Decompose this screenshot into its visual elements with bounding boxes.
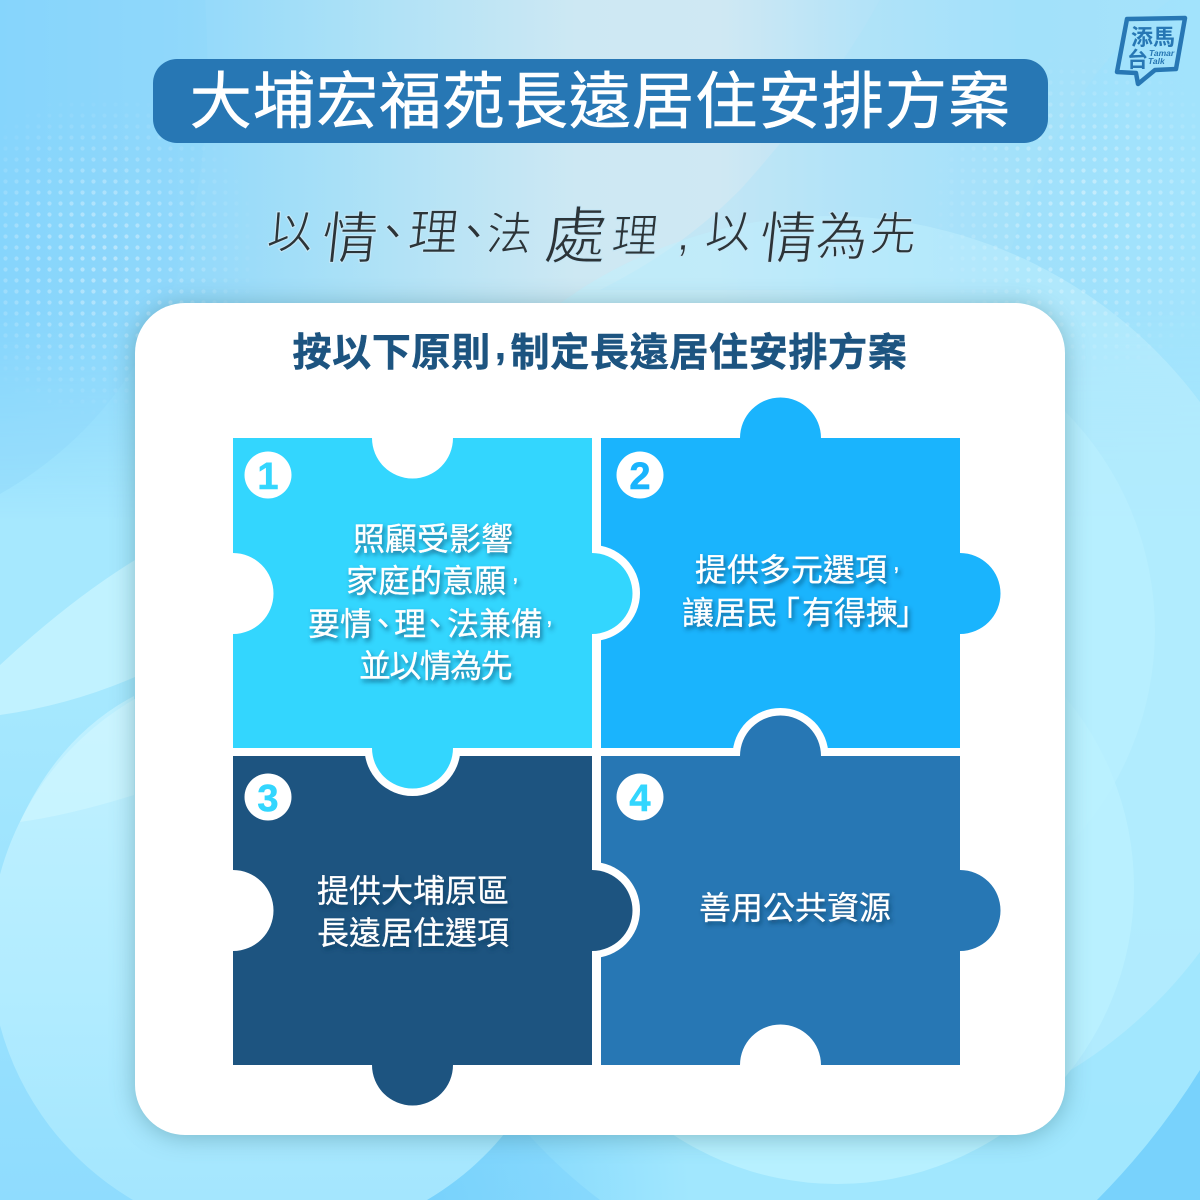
title banner: 大埔宏福苑長遠居住安排方案	[190, 68, 1011, 137]
logo: Tamar Talk: Tamar	[1149, 48, 1175, 58]
logo: Tamar Talk: 台	[1127, 48, 1148, 72]
text 2: 有得揀	[802, 595, 898, 631]
piece 1	[233, 438, 632, 796]
handwritten subtitle: 情	[319, 207, 381, 270]
lens bands	[0, 560, 135, 715]
joint: piece 1 to piece 2	[592, 545, 640, 641]
handwritten subtitle: 法	[484, 208, 535, 260]
handwritten subtitle: 以	[265, 206, 316, 258]
text 1: 、	[367, 606, 399, 642]
text 2: 提供多元選項	[695, 552, 887, 588]
text 2: ,	[893, 549, 900, 576]
panel: principles card	[135, 303, 1065, 1135]
handwritten subtitle: ,	[675, 205, 694, 261]
text 1: 照顧受影響	[353, 521, 513, 557]
piece 2	[601, 398, 1001, 748]
text 1: 家庭的意願	[346, 563, 506, 599]
piece 3	[233, 756, 632, 1106]
text 1: ,	[512, 560, 519, 587]
text 2: 讓居民	[682, 595, 778, 631]
text 1: 要情	[308, 606, 372, 642]
badge 3: 3	[257, 778, 279, 820]
text 1: 、	[419, 606, 451, 642]
handwritten subtitle: 理	[609, 210, 661, 262]
badge 2	[616, 452, 664, 498]
text 2: 「	[768, 595, 800, 631]
handwritten subtitle: 情	[757, 207, 819, 270]
text 1: 並以情為先	[359, 648, 512, 684]
badge 1: 1	[257, 456, 279, 498]
text 1: 理	[394, 606, 426, 642]
text 2: 」	[896, 595, 928, 631]
joint: piece 3 to piece 4	[592, 756, 640, 1065]
card heading: 按以下原則,制定長遠居住安排方案	[292, 325, 908, 375]
badge 4: 4	[629, 778, 651, 820]
badge 4	[616, 774, 664, 820]
handwritten subtitle: 以	[703, 206, 754, 258]
handwritten subtitle: 、	[365, 205, 420, 261]
badge 3	[244, 774, 292, 820]
text 1: ,	[546, 603, 553, 630]
logo: Tamar Talk: Talk	[1148, 56, 1166, 66]
text 4: 善用公共資源	[699, 890, 891, 926]
text 3: 提供大埔原區	[317, 873, 509, 909]
handwritten subtitle: 處	[541, 203, 611, 272]
handwritten subtitle: 先	[868, 208, 919, 260]
handwritten subtitle: 理	[406, 205, 461, 261]
handwritten subtitle: 、	[446, 205, 501, 261]
handwritten subtitle: 為	[813, 209, 871, 267]
badge 1	[244, 452, 292, 498]
text 1: 法兼備	[447, 606, 543, 642]
logo: Tamar Talk: 添馬	[1131, 25, 1175, 50]
text 3: 長遠居住選項	[317, 915, 509, 951]
badge 2: 2	[629, 456, 651, 498]
piece 4	[601, 708, 1001, 1065]
